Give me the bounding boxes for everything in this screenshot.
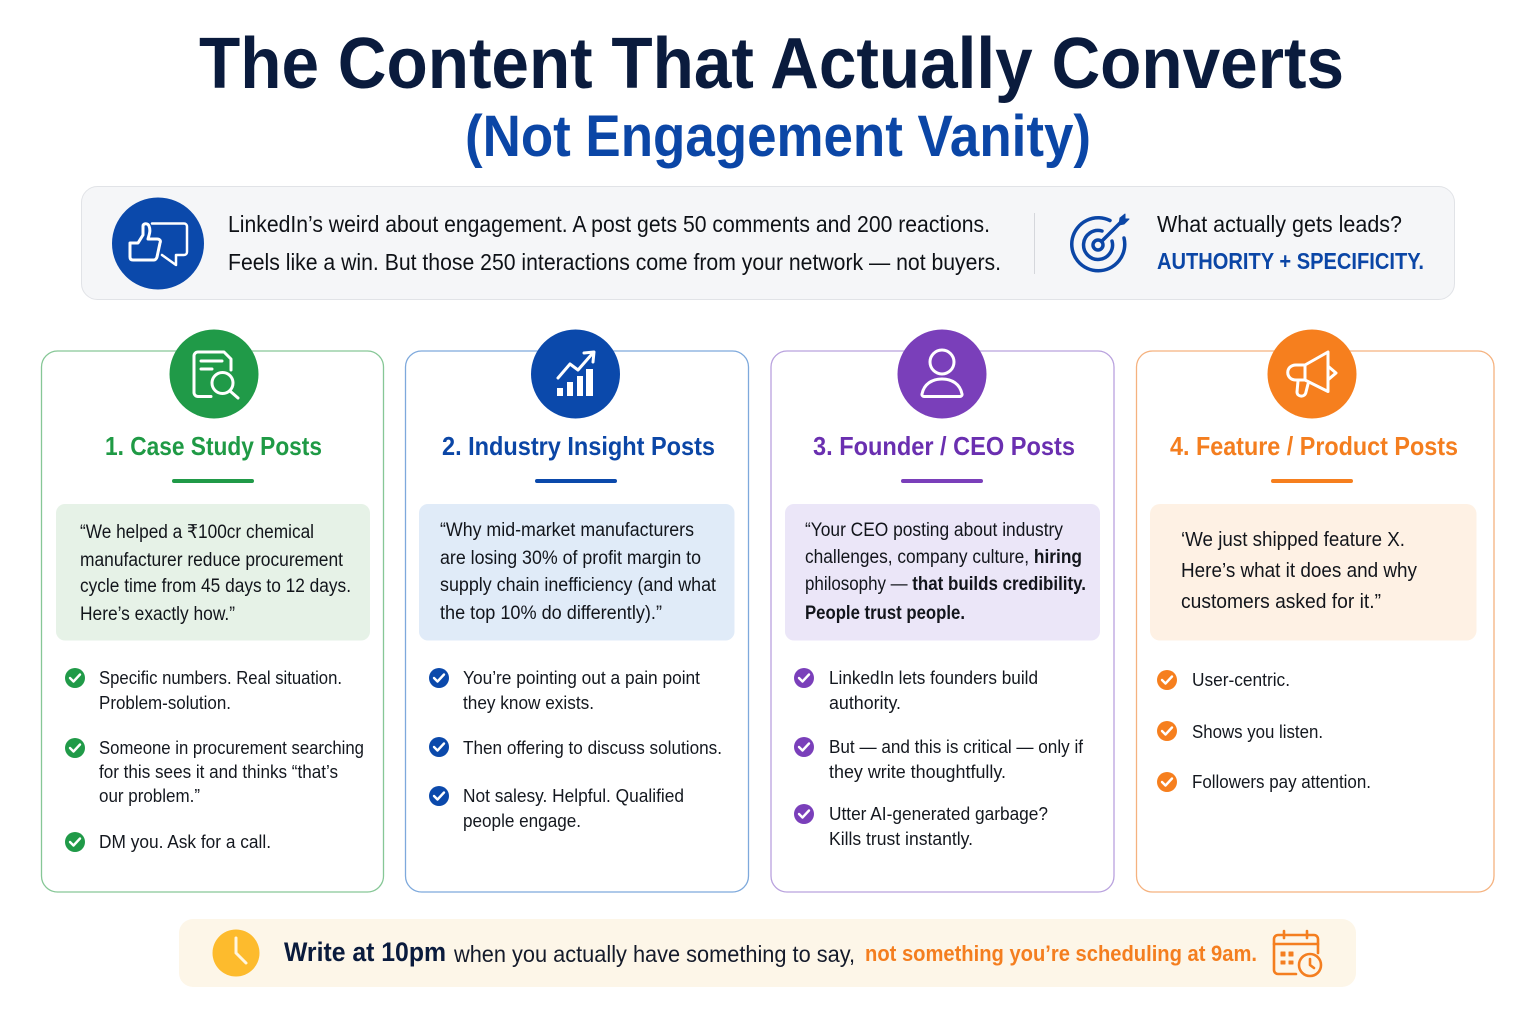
text: write at 10pm: Write at 10pm (284, 937, 446, 967)
quote box (419, 504, 734, 640)
icon: clock (212, 930, 260, 976)
title (199, 24, 1344, 169)
bullet list: people engage. (463, 811, 581, 831)
quote box: Here’s exactly how.” (80, 604, 235, 625)
text: what gets leads (1157, 211, 1424, 274)
bullet list: But — and this is critical — only if (829, 737, 1084, 757)
quote box: customers asked for it.” (1181, 590, 1381, 613)
text: write at 10pm (284, 937, 1257, 967)
icon: megaphone (1268, 330, 1356, 418)
bullet list (429, 668, 722, 831)
quote box: manufacturer reduce procurement (80, 550, 344, 571)
quote box: are losing 30% of profit margin to (440, 548, 701, 569)
quote box: cycle time from 45 days to 12 days. (80, 576, 351, 597)
bullet list: authority. (829, 693, 901, 713)
bullet list: they write thoughtfully. (829, 762, 1006, 782)
bullet list: our problem.” (99, 786, 200, 806)
quote box: Here’s what it does and why (1181, 559, 1418, 582)
panel: industry insight posts (406, 330, 748, 892)
callout: bottom banner (179, 919, 1356, 987)
panel: case study posts (42, 330, 384, 892)
quote box (1150, 504, 1476, 640)
icon: calendar clock (1274, 931, 1321, 976)
bullet list (65, 668, 364, 852)
panel: founder CEO posts (771, 330, 1114, 892)
icon: document search (170, 330, 258, 418)
heading: 1. Case Study Posts (105, 431, 322, 461)
bullet list: User-centric. (1192, 670, 1290, 690)
icon: thumbs up and speech bubble (112, 198, 204, 290)
text: write at 10pm: when you actually have something to say, (453, 941, 855, 967)
quote box: supply chain inefficiency (and what (440, 575, 717, 596)
bullet list: You’re pointing out a pain point (463, 668, 700, 688)
icon: person (898, 330, 986, 418)
quote box (56, 504, 370, 640)
subtitle: (Not Engagement Vanity) (465, 104, 1091, 169)
quote box: the top 10% do differently).” (440, 603, 662, 624)
text: engagement intro: Feels like a win. But those 250 interactions come from your network — not buyers. (228, 249, 1001, 275)
quote box: philosophy — that builds credibility. (805, 574, 1086, 595)
quote box: People trust people. (805, 603, 965, 624)
bullet list: they know exists. (463, 693, 594, 713)
quote box: “Your CEO posting about industry (805, 520, 1063, 541)
heading: 3. Founder / CEO Posts (813, 431, 1075, 461)
bullet list: DM you. Ask for a call. (99, 832, 271, 852)
quote box: challenges, company culture, hiring (805, 547, 1082, 568)
quote box: “We helped a ₹100cr chemical (80, 522, 314, 543)
bullet list: Not salesy. Helpful. Qualified (463, 786, 684, 806)
bullet list: Someone in procurement searching (99, 738, 364, 758)
bullet list: Specific numbers. Real situation. (99, 668, 342, 688)
icon: target (1072, 214, 1129, 271)
bullet list: Utter AI-generated garbage? (829, 804, 1048, 824)
quote box (785, 504, 1100, 640)
bullet list: for this sees it and thinks “that’s (99, 762, 338, 782)
text: engagement intro (228, 211, 1001, 275)
bullet list: Then offering to discuss solutions. (463, 738, 722, 758)
icon: rising chart (531, 330, 620, 418)
text: what gets leads: What actually gets leads? (1157, 211, 1402, 237)
bullet list: Problem-solution. (99, 693, 231, 713)
bullet list (1157, 670, 1371, 792)
bullet list: Followers pay attention. (1192, 772, 1371, 792)
bullet list: LinkedIn lets founders build (829, 668, 1038, 688)
heading: 4. Feature / Product Posts (1170, 431, 1458, 461)
heading: 2. Industry Insight Posts (442, 431, 715, 461)
panel: feature product posts (1136, 330, 1494, 892)
quote box: “Why mid-market manufacturers (440, 520, 694, 541)
title: The Content That Actually Converts (199, 24, 1344, 104)
bullet list (794, 668, 1084, 849)
text: engagement intro: LinkedIn’s weird about engagement. A post gets 50 comments and 200 reactions. (228, 211, 990, 237)
bullet list: Shows you listen. (1192, 722, 1323, 742)
panel: intro banner (82, 186, 1454, 300)
bullet list: Kills trust instantly. (829, 829, 973, 849)
text: what gets leads: AUTHORITY + SPECIFICITY. (1157, 248, 1424, 274)
text: write at 10pm: not something you’re scheduling at 9am. (865, 941, 1257, 966)
quote box: ‘We just shipped feature X. (1181, 528, 1405, 551)
